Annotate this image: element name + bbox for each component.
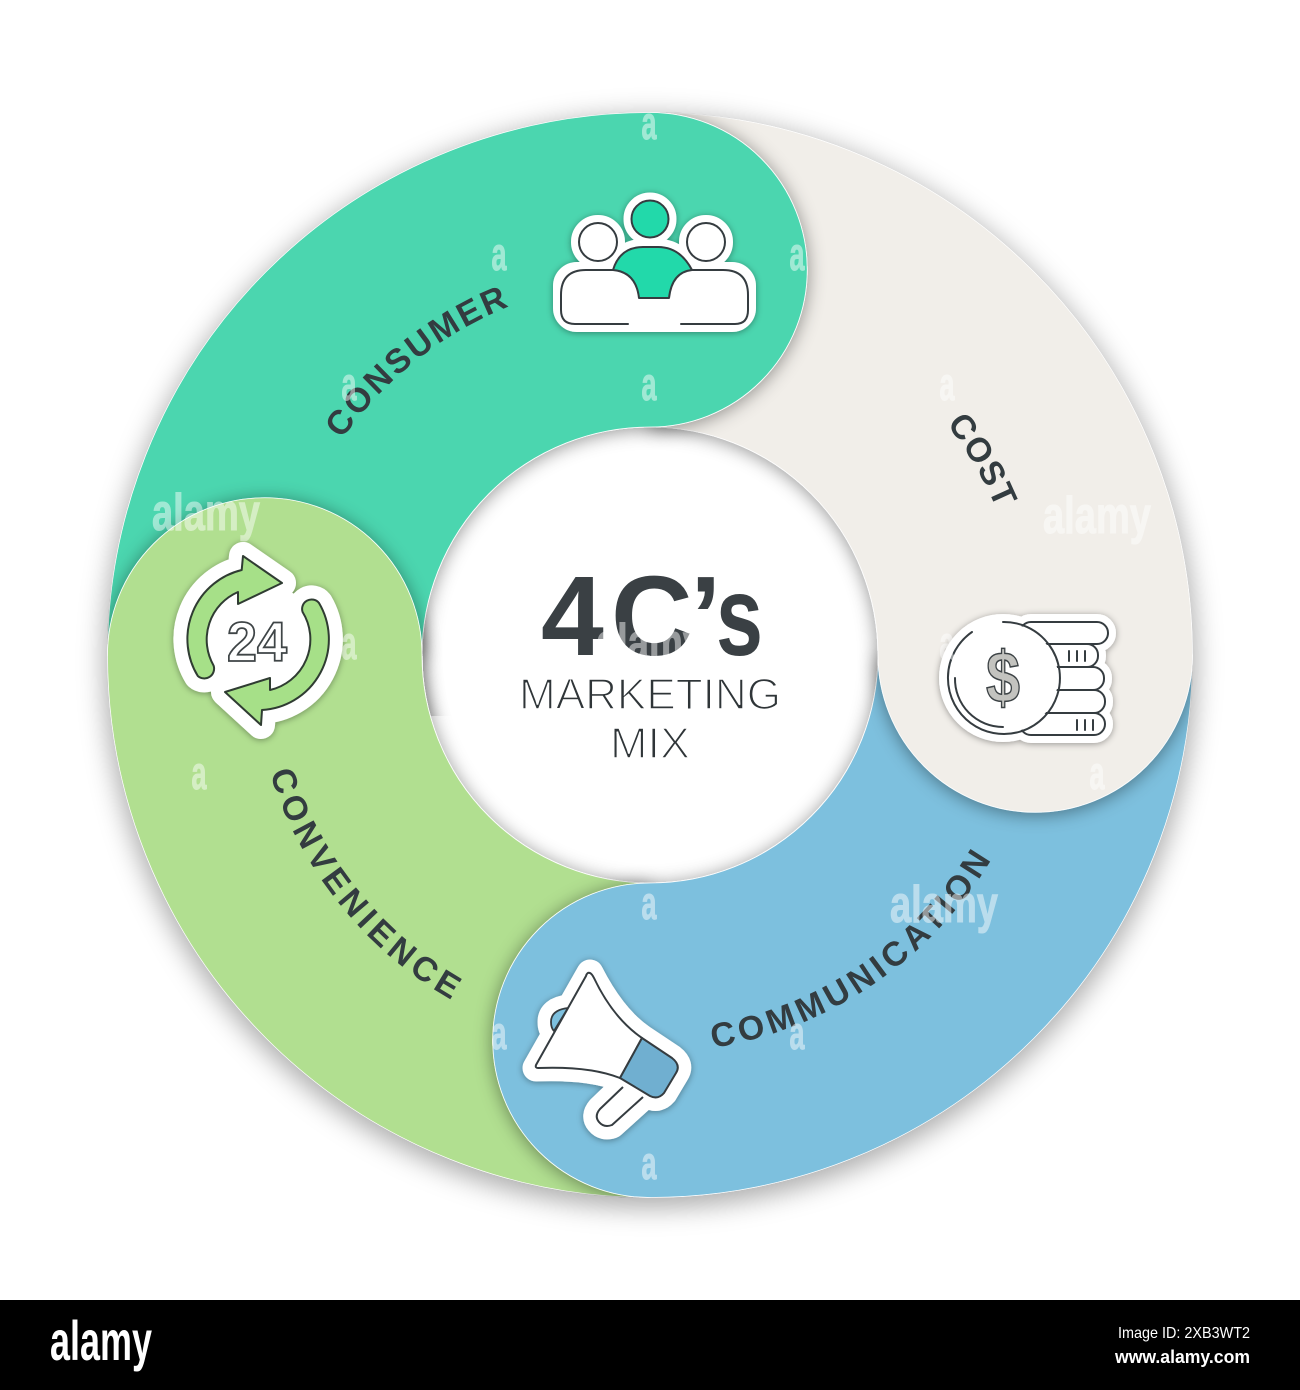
watermarks: alamy	[596, 614, 704, 672]
panel: convenience rounded cap	[107, 488, 443, 716]
label: convenience: CONVENIENCE	[272, 769, 462, 1000]
watermarks: alamy	[1043, 487, 1151, 545]
icon: 24-hour circular arrows: 24	[227, 610, 287, 673]
footer bar: Image ID: 2XB3WT2	[1118, 1325, 1250, 1342]
label: communication: COMMUNICATION	[712, 849, 990, 1046]
label: cost: COST	[951, 415, 1018, 502]
icon: coin stack with dollar: $	[986, 638, 1020, 718]
ring of four segments	[108, 112, 1192, 1198]
outer soft shadow	[104, 116, 1196, 1208]
watermarks: a	[790, 1007, 805, 1059]
watermarks: a	[790, 228, 805, 280]
watermarks: a	[342, 617, 357, 669]
title: 4C's: s	[716, 553, 763, 679]
subtitle: marketing mix: MARKETING	[519, 670, 781, 719]
watermarks	[152, 97, 1151, 1189]
watermarks: alamy	[152, 484, 260, 542]
watermarks: a	[642, 97, 657, 149]
watermarks: a	[192, 747, 207, 799]
watermarks: a	[642, 358, 657, 410]
watermarks: a	[940, 358, 955, 410]
watermarks: a	[342, 358, 357, 410]
watermarks: alamy	[890, 876, 998, 934]
icon: megaphone	[536, 973, 678, 1126]
subtitle: marketing mix	[519, 670, 781, 768]
watermarks: a	[492, 228, 507, 280]
watermarks: a	[492, 1007, 507, 1059]
watermarks: a	[642, 877, 657, 929]
icon: consumer group of people	[561, 200, 748, 324]
icon: coin stack with dollar	[947, 622, 1108, 735]
panel: communication segment	[493, 655, 1192, 1198]
watermarks: a	[940, 617, 955, 669]
panel: convenience segment base	[107, 612, 656, 1198]
footer bar	[0, 1300, 1300, 1390]
icon: 24-hour circular arrows	[187, 556, 329, 725]
label: consumer: CONSUMER	[328, 288, 508, 434]
panel: consumer segment	[108, 112, 807, 655]
panel: cost segment	[650, 112, 1192, 812]
title: 4C's: 4C’	[541, 553, 721, 679]
subtitle: marketing mix: MIX	[610, 719, 690, 768]
footer bar: alamy	[50, 1309, 152, 1372]
watermarks: a	[642, 1137, 657, 1189]
centre circle	[418, 423, 882, 887]
footer bar: www.alamy.com	[1114, 1347, 1250, 1367]
watermarks: a	[1090, 747, 1105, 799]
